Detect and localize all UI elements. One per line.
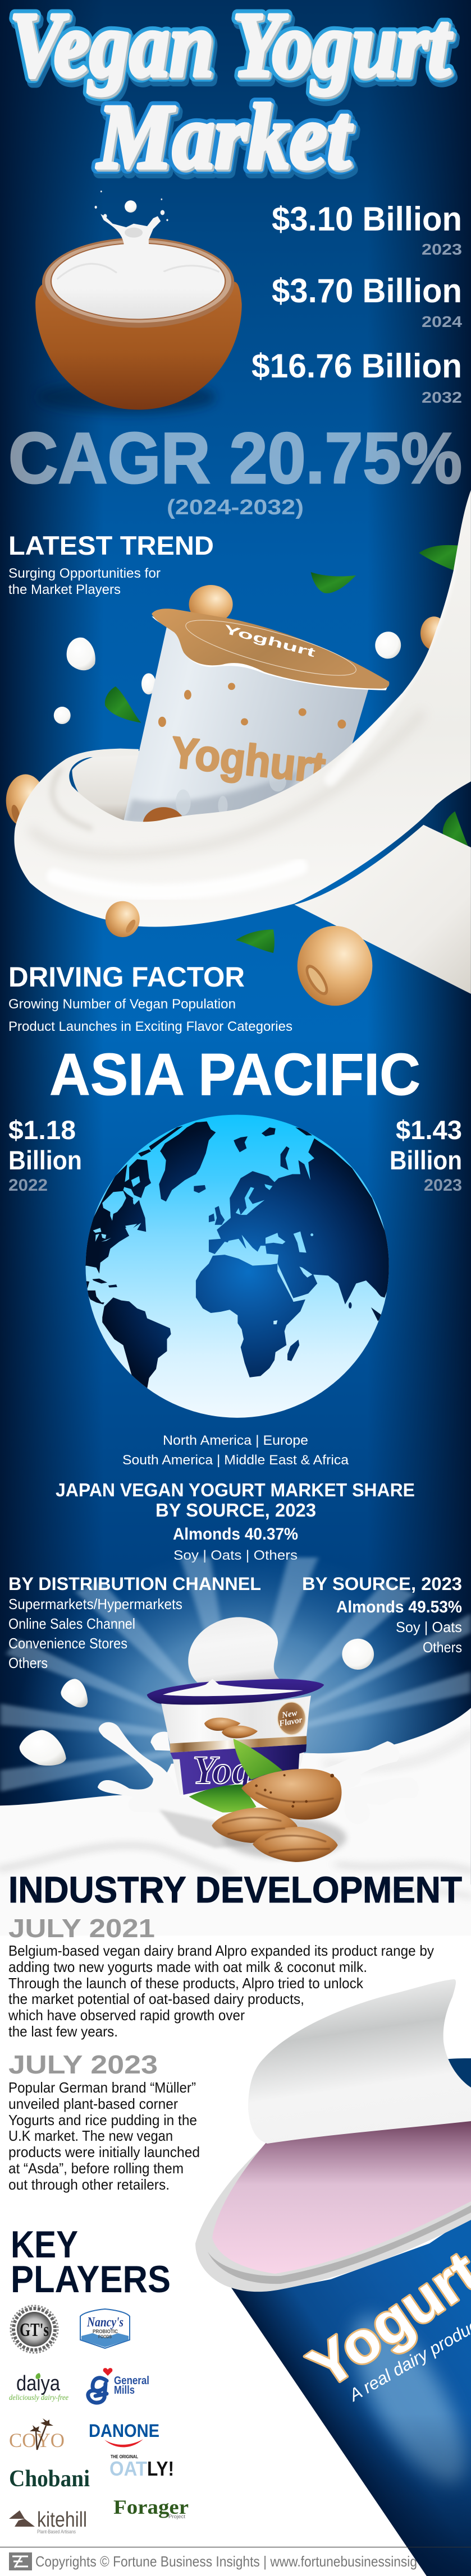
body text: July 2021 [8, 1914, 434, 2040]
logo: Chobani: Chobani [9, 2466, 90, 2492]
cup body [231, 2215, 471, 2576]
logo: Nancy's: FOODS [98, 2334, 112, 2339]
heading: driving factor: DRIVING FACTOR [8, 961, 245, 993]
panel: by distribution channel [8, 1574, 261, 1671]
title: Market [98, 90, 355, 192]
logo: Oatly: OAT [109, 2457, 147, 2480]
cup script labels [193, 1708, 303, 1792]
splash arms [98, 1722, 419, 1824]
stat: Asia Pacific 2022: Billion [8, 1145, 82, 1175]
lid label text: Yoghurt [222, 622, 318, 660]
regions list: South America | Middle East & Africa [122, 1453, 349, 1468]
stat: 2023 value [272, 200, 462, 258]
logo: Forager: Project [168, 2514, 186, 2519]
logo: daiya: deliciously dairy-free [9, 2394, 68, 2402]
stat: 2032 value: 2032 [422, 389, 462, 406]
yogurt surface [163, 1679, 303, 1696]
light rays and milk wave [0, 1549, 471, 1936]
stat: 2032 value [251, 347, 462, 406]
logo: Danone: DANONE [89, 2421, 159, 2441]
pink yogurt [212, 2120, 471, 2274]
logo: kite hill [9, 2508, 87, 2534]
cup rim [147, 1679, 324, 1706]
title: Market [96, 85, 353, 188]
stat: Asia Pacific 2023: $1.43 [396, 1115, 462, 1145]
Japan market share block: Almonds 40.37% [173, 1525, 298, 1543]
Japan market share block: BY SOURCE, 2023 [156, 1500, 316, 1520]
heading: latest trend: LATEST TREND [8, 531, 214, 560]
body text: July 2023: unveiled plant-based corner [8, 2095, 178, 2112]
cup lid [152, 609, 389, 690]
icon: world globe [81, 1114, 392, 1418]
footer copyright: Copyrights © Fortune Business Insights | www.fortunebusinessinsig [35, 2553, 417, 2570]
panel: by source [302, 1574, 462, 1656]
CAGR headline: (2024-2032) [167, 496, 304, 519]
Japan market share block [56, 1480, 415, 1563]
logo: General Mills [88, 2368, 149, 2403]
logo: kite hill: Plant-Based Artisans [37, 2529, 76, 2534]
icon: Fortune Business Insights mark [9, 2552, 32, 2570]
body text: July 2023 [8, 2050, 200, 2193]
heading: driving factor: Product Launches in Exciting Flavor Categories [8, 1019, 292, 1034]
body text: July 2021: the last few years. [8, 2023, 118, 2040]
printed almonds [204, 1717, 258, 1738]
logo: Nancy's [80, 2309, 130, 2348]
heading: latest trend [8, 531, 214, 597]
heading: latest trend: the Market Players [8, 582, 121, 597]
illustration: pink yogurt cup [195, 1979, 471, 2576]
Japan market share block: JAPAN VEGAN YOGURT MARKET SHARE [56, 1480, 415, 1500]
flying milk drops [20, 1639, 374, 1766]
footer rule [0, 2546, 471, 2547]
cup shade [231, 2215, 471, 2576]
panel: by distribution channel: Supermarkets/Hypermarkets [8, 1596, 182, 1612]
stat: Asia Pacific 2023 [390, 1115, 462, 1195]
title: Market [96, 85, 353, 188]
body text: July 2023: Yogurts and rice pudding in the [8, 2112, 197, 2128]
cup body [123, 627, 369, 842]
body text: July 2021: JULY 2021 [8, 1914, 155, 1943]
body text: July 2023: Popular German brand “Müller” [8, 2079, 196, 2096]
logo: kite hill: kitehill [37, 2508, 87, 2532]
body text: July 2023: at “Asda”, before rolling them [8, 2160, 184, 2177]
logo: daiya: daiya [16, 2372, 61, 2395]
milk drops and leaves [54, 572, 471, 953]
body text: July 2021: which have observed rapid growth over [8, 2007, 245, 2024]
body text: July 2021: Belgium-based vegan dairy brand Alpro expanded its product range by [8, 1942, 434, 1959]
front milk ribbon [14, 490, 471, 927]
logo: Forager: Forager [113, 2496, 189, 2518]
body text: July 2023: U.K market. The new vegan [8, 2127, 173, 2144]
cup body [161, 1695, 311, 1795]
panel: by source: Almonds 49.53% [336, 1598, 462, 1616]
logo: Nancy's: PROBIOTIC [93, 2329, 118, 2334]
panel: by distribution channel: Others [8, 1655, 48, 1671]
logo: Oatly [109, 2454, 174, 2480]
body text: July 2021: Through the launch of these products, Alpro tried to unlock [8, 1975, 364, 1992]
almonds and leaves [189, 1739, 346, 1862]
peeled lid [248, 1979, 471, 2144]
soybeans and leaves in front [106, 901, 372, 1006]
body text: July 2023: out through other retailers. [8, 2176, 170, 2193]
logo: COYO [9, 2418, 65, 2451]
panel: by source: Soy | Oats [396, 1619, 462, 1635]
stat: 2024 value: 2024 [422, 313, 462, 330]
illustration: almond yogurt cup [147, 1617, 324, 1848]
panel: by distribution channel: Online Sales Channel [8, 1615, 135, 1632]
stat: 2024 value: $3.70 Billion [272, 272, 462, 310]
logo: Oatly: LY! [147, 2457, 174, 2480]
heading: driving factor: Growing Number of Vegan Population [8, 997, 236, 1012]
panel: by source: Others [423, 1639, 462, 1656]
panel: by distribution channel: Convenience Stores [8, 1635, 127, 1652]
body text: July 2021: adding two new yogurts made with oat milk & coconut milk. [8, 1959, 367, 1975]
heading: key players: PLAYERS [11, 2258, 171, 2301]
cup script labels: Yog [193, 1748, 251, 1792]
flavor badge [277, 1702, 305, 1735]
body text: July 2021: the market potential of oat-based dairy products, [8, 1990, 304, 2007]
panel: by source: BY SOURCE, 2023 [302, 1574, 462, 1594]
logo: General Mills: Mills [114, 2384, 135, 2397]
logo: GT's [11, 2306, 58, 2353]
back milk ribbon [72, 751, 471, 994]
stat: 2032 value: $16.76 Billion [251, 347, 462, 385]
stat: Asia Pacific 2023: Billion [390, 1145, 462, 1175]
cup highlight [333, 2301, 471, 2500]
regions list: North America | Europe [163, 1433, 308, 1448]
stat: Asia Pacific 2022: $1.18 [8, 1115, 76, 1145]
rim [195, 2124, 471, 2292]
icon: yogurt bowl with splash [35, 191, 242, 413]
lid peel [188, 1617, 304, 1690]
heading: latest trend: Surging Opportunities for [8, 566, 161, 581]
heading: Asia Pacific: ASIA PACIFIC [49, 1042, 420, 1108]
logo: daiya [9, 2372, 68, 2402]
title: Market [98, 87, 354, 190]
stat: 2023 value: $3.10 Billion [272, 200, 462, 238]
cup label text: Yoghurt [168, 727, 328, 792]
panel: by distribution channel: BY DISTRIBUTION CHANNEL [8, 1574, 261, 1594]
stat: 2023 value: 2023 [422, 241, 462, 258]
CAGR headline: CAGR 20.75% [8, 418, 462, 499]
side splash [150, 1732, 170, 1751]
logo: Oatly: THE ORIGINAL [111, 2454, 138, 2459]
gold band [170, 1736, 307, 1753]
stat: Asia Pacific 2022 [8, 1115, 82, 1195]
soybeans behind cup [6, 585, 447, 827]
logo: Nancy's: Nancy's [86, 2315, 124, 2330]
regions list [122, 1433, 349, 1468]
title [10, 0, 455, 192]
stat: Asia Pacific 2022: 2022 [8, 1176, 48, 1195]
stat: 2024 value [272, 272, 462, 330]
heading: driving factor [8, 961, 292, 1034]
illustration: yoghurt cup and milk ribbon [6, 490, 471, 1006]
blue background [0, 0, 471, 1884]
body text: July 2023: JULY 2023 [8, 2050, 158, 2079]
top right leaf [419, 545, 461, 573]
Japan market share block: Soy | Oats | Others [173, 1548, 298, 1563]
cup script labels: Flavor [278, 1716, 303, 1729]
heading: key players: KEY [11, 2223, 78, 2266]
stat: Asia Pacific 2023: 2023 [424, 1176, 462, 1195]
purple label [170, 1744, 307, 1795]
milk shadow [159, 1810, 254, 1848]
heading: key players [11, 2223, 171, 2301]
logo: General Mills: General [114, 2375, 149, 2387]
logo: COYO: COYO [9, 2429, 65, 2451]
body text: July 2023: products were initially launched [8, 2144, 200, 2160]
cup script labels: New [281, 1708, 299, 1720]
back of cup [443, 2058, 471, 2092]
logo: GT's: GT's [20, 2320, 49, 2340]
